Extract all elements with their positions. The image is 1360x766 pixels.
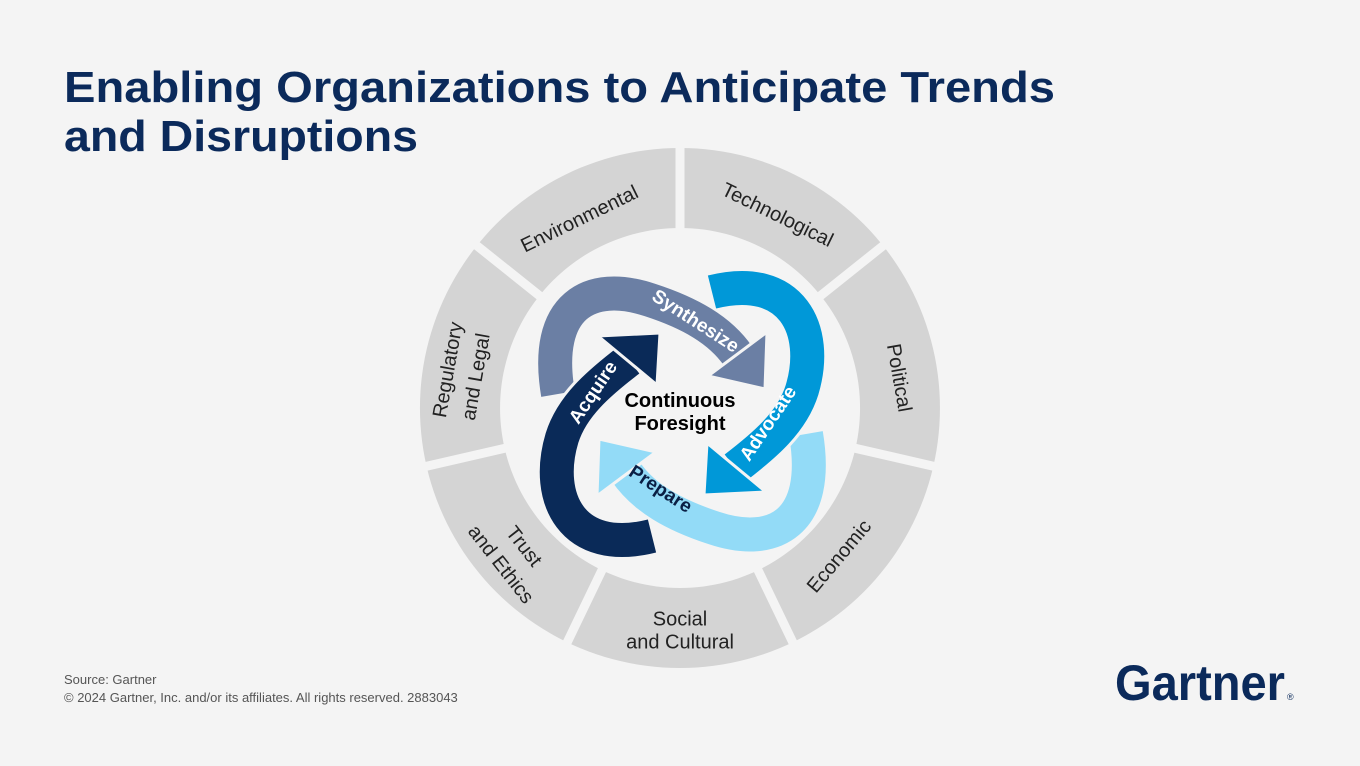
source footer: © 2024 Gartner, Inc. and/or its affiliates. All rights reserved. 2883043 xyxy=(64,690,458,705)
arrow labels: Acquire xyxy=(565,358,622,428)
segment labels xyxy=(429,179,916,653)
source footer: Source: Gartner xyxy=(64,672,157,687)
center label xyxy=(624,390,736,435)
gartner logo: ® xyxy=(1287,692,1294,702)
segment labels: Economic xyxy=(803,516,876,597)
title xyxy=(64,63,1055,161)
arrow: acquire xyxy=(557,333,660,540)
segment labels: Social xyxy=(653,608,707,630)
segment labels: Political xyxy=(882,342,916,414)
arrow: advocate xyxy=(704,288,807,495)
arrow labels: Synthesize xyxy=(648,286,743,357)
title: and Disruptions xyxy=(64,112,418,161)
title: Enabling Organizations to Anticipate Trends xyxy=(64,63,1055,112)
segment labels: Technological xyxy=(718,179,837,252)
arrow: prepare xyxy=(597,434,809,534)
source footer xyxy=(64,672,458,705)
arrow: synthesize xyxy=(555,294,767,394)
segment labels: Environmental xyxy=(517,181,642,257)
ring of external forces xyxy=(419,140,941,668)
segment labels: and Cultural xyxy=(626,631,734,653)
arrow labels: Advocate xyxy=(736,382,801,465)
segment labels: and Ethics xyxy=(463,521,538,608)
segment labels: and Legal xyxy=(458,332,495,422)
gartner logo: Gartner xyxy=(1115,655,1285,711)
segment labels: Regulatory xyxy=(429,320,468,419)
center label: Continuous xyxy=(624,390,736,412)
segment labels: Trust xyxy=(501,522,546,571)
arrow labels: Prepare xyxy=(625,462,696,518)
center label: Foresight xyxy=(634,413,726,435)
arrow labels xyxy=(565,286,801,518)
